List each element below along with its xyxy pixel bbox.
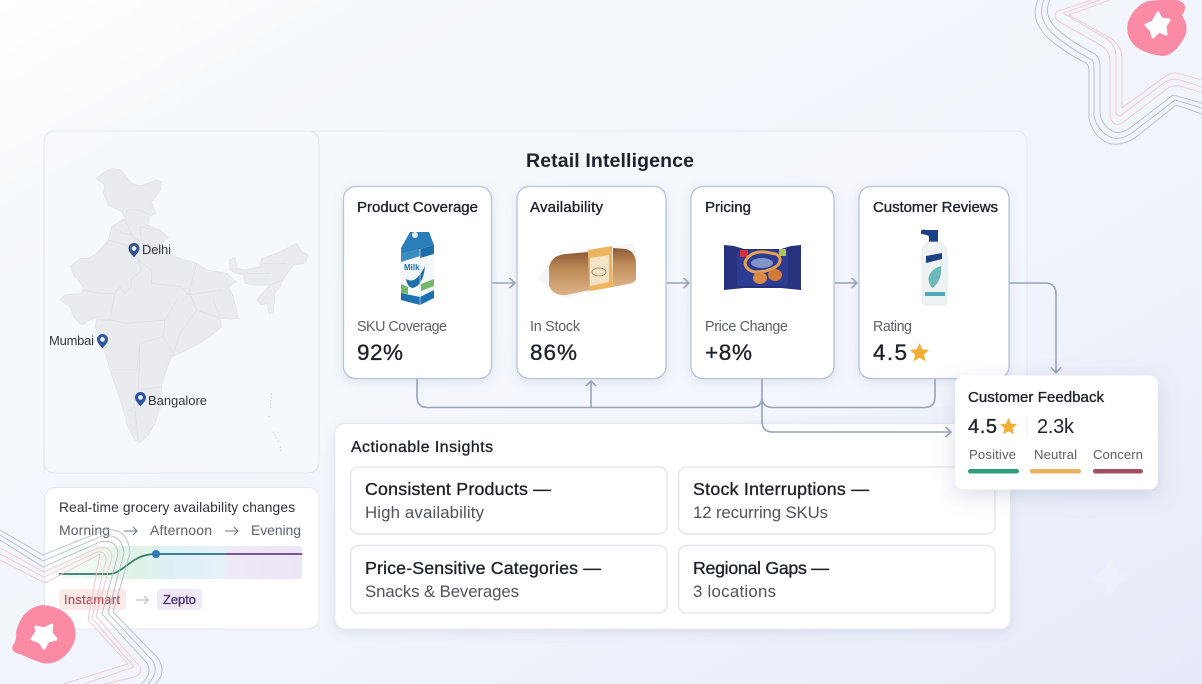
card: Pricing — [691, 186, 834, 378]
map: India outline with states — [60, 168, 308, 451]
label: Delhi: Delhi — [142, 242, 171, 257]
card heading: Pricing — [705, 199, 751, 216]
metric label: Price Change — [705, 319, 788, 335]
icon: faint sparkle — [1090, 558, 1130, 598]
card: Availability — [517, 186, 666, 378]
card heading: Customer Reviews — [873, 199, 998, 216]
title: Retail Intelligence — [526, 150, 694, 172]
feedback heading: Customer Feedback — [968, 389, 1104, 406]
metric label: In Stock — [530, 319, 581, 335]
time steps row: Afternoon — [150, 522, 212, 538]
legend: positive — [968, 447, 1019, 474]
connector: pricing to feedback over insights panel — [762, 420, 951, 436]
metric value: 92% — [357, 340, 403, 365]
icon: shampoo bottle — [921, 230, 947, 305]
card heading: Availability — [530, 199, 604, 216]
metric value: +8% — [705, 340, 752, 365]
insight: consistent products — [350, 467, 667, 534]
metric label: SKU Coverage — [357, 319, 447, 335]
icon: top-right pink star badge — [1127, 0, 1187, 56]
insight: stock interruptions: 12 recurring SKUs — [693, 503, 828, 522]
insight: regional gaps: Regional Gaps — — [693, 558, 829, 578]
metric label: Rating — [873, 319, 912, 335]
heading: real-time changes: Real-time grocery availability changes — [59, 500, 295, 515]
card: Customer Reviews — [859, 186, 1009, 378]
feedback count: 2.3k — [1037, 416, 1075, 438]
connector: card arrows — [492, 278, 857, 288]
insight: regional gaps: 3 locations — [693, 582, 776, 601]
icon: Delhi pin — [128, 243, 140, 258]
legend: neutral — [1030, 447, 1081, 474]
arrow: Instamart to Zepto — [136, 596, 148, 604]
icon: bread loaf — [538, 243, 638, 298]
icon: milk carton — [401, 232, 434, 305]
icon: Bangalore pin — [135, 392, 146, 406]
legend: concern: Concern — [1093, 447, 1143, 462]
panel: Actionable Insights — [335, 424, 1010, 629]
insight: consistent products: Consistent Products — — [365, 479, 551, 499]
insight: price-sensitive categories — [350, 546, 667, 613]
tag: Zepto — [157, 589, 202, 610]
card: Product Coverage — [344, 186, 492, 378]
insight: stock interruptions — [678, 467, 995, 534]
feedback rating and star — [968, 416, 1017, 438]
legend: neutral: Neutral — [1034, 447, 1077, 462]
insight: regional gaps — [678, 546, 995, 613]
label: Bangalore: Bangalore — [148, 393, 207, 408]
panel: real-time availability — [44, 488, 319, 629]
insight: consistent products: High availability — [365, 503, 485, 522]
tag: Instamart: Instamart — [64, 593, 121, 607]
time steps row — [59, 522, 301, 538]
icon: milk carton: Milk — [404, 263, 420, 272]
chart: availability line — [59, 546, 302, 579]
panel: retail intelligence container — [44, 131, 1027, 473]
decoration: top-right star lines — [1035, 0, 1202, 144]
tag: Instamart — [59, 589, 126, 610]
metric value: 86% — [530, 340, 577, 365]
legend: concern — [1093, 447, 1143, 474]
feedback rating and star: 4.5 — [968, 416, 997, 438]
insight: stock interruptions: Stock Interruptions — — [693, 479, 869, 499]
metric value and star — [873, 340, 929, 365]
insight: price-sensitive categories: Snacks & Beverages — [365, 582, 519, 601]
label: Mumbai: Mumbai — [49, 333, 94, 348]
metric value and star: 4.5 — [873, 340, 907, 365]
connector: reviews to feedback — [1009, 283, 1060, 373]
connector: pricing stem — [761, 400, 763, 424]
panel: India map — [44, 131, 319, 473]
icon: bottom-left pink star badge — [12, 605, 76, 663]
tag: Zepto: Zepto — [163, 592, 196, 607]
decoration: bottom-left star lines — [0, 530, 162, 684]
insight: price-sensitive categories: Price-Sensitive Categories — — [365, 558, 601, 578]
icon: Mumbai pin — [97, 334, 108, 348]
heading: insights: Actionable Insights — [351, 439, 493, 456]
card heading: Product Coverage — [357, 199, 478, 216]
time steps row: Evening — [251, 522, 301, 538]
connector: lower flow lines — [417, 379, 935, 408]
legend: positive: Positive — [969, 447, 1016, 462]
icon: biscuit packet — [724, 245, 801, 290]
time steps row: Morning — [59, 522, 110, 538]
card: Customer Feedback — [955, 376, 1158, 490]
